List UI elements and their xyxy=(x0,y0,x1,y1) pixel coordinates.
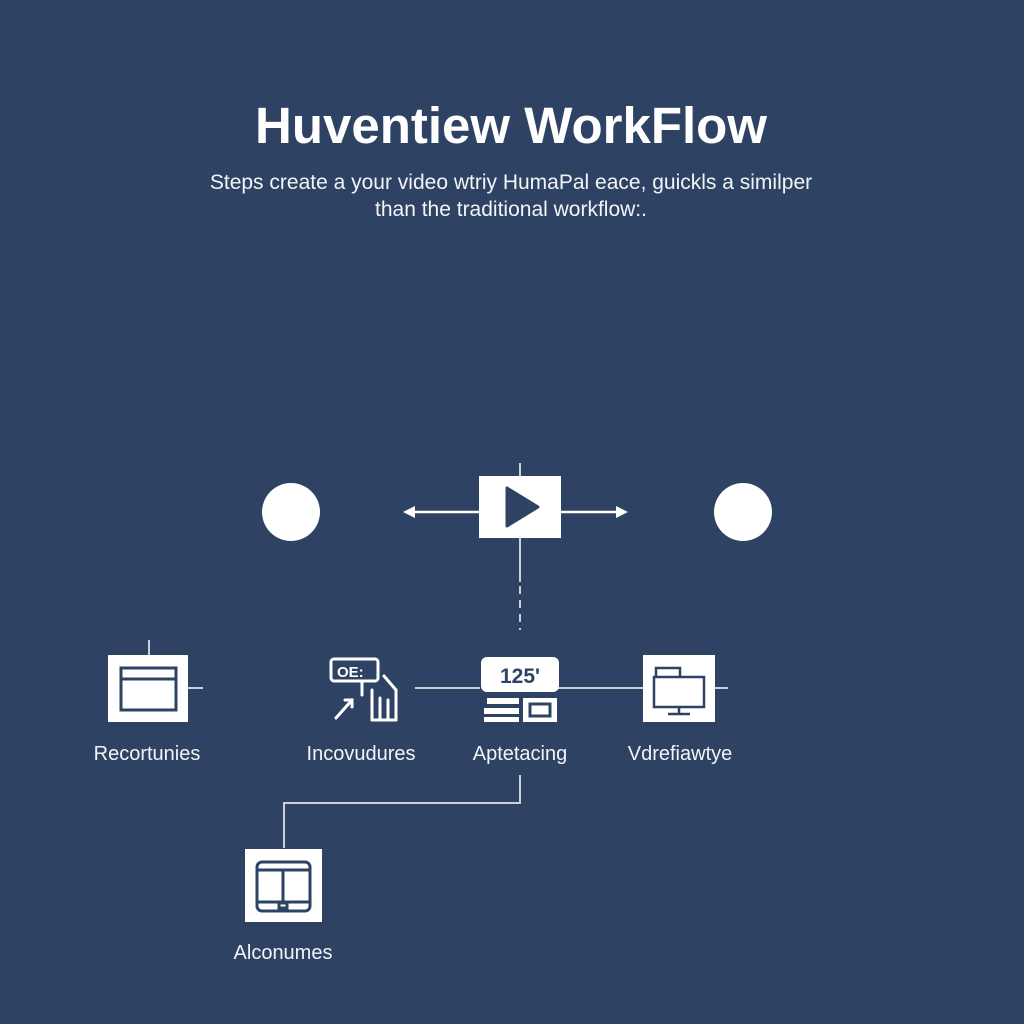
icon: counter (step 3): 125' xyxy=(500,665,540,688)
arrow left xyxy=(403,506,479,518)
circle left xyxy=(262,483,320,541)
circle right xyxy=(714,483,772,541)
icon: tools (step 2): OE: xyxy=(337,664,364,681)
labels: Vdrefiawtye xyxy=(628,743,732,765)
labels xyxy=(94,743,732,964)
icon: tablet (step 5) xyxy=(245,849,322,922)
icon: window (step 1) xyxy=(108,655,188,722)
subtitle: Steps create a your video wtriy HumaPal eace, guickls a similper xyxy=(210,171,812,194)
connector lines xyxy=(149,463,728,848)
subtitle xyxy=(210,171,812,221)
labels: Recortunies xyxy=(94,743,200,765)
labels: Alconumes xyxy=(234,942,332,964)
labels: Incovudures xyxy=(307,743,415,765)
subtitle: than the traditional workflow:. xyxy=(375,198,647,221)
icon: play box xyxy=(479,476,561,538)
icon: monitor (step 4) xyxy=(643,655,715,722)
arrow right xyxy=(561,506,628,518)
icon: counter (step 3) xyxy=(481,657,559,722)
title: Huventiew WorkFlow xyxy=(255,97,767,154)
labels: Aptetacing xyxy=(473,743,567,765)
icon: tools (step 2) xyxy=(331,659,396,720)
